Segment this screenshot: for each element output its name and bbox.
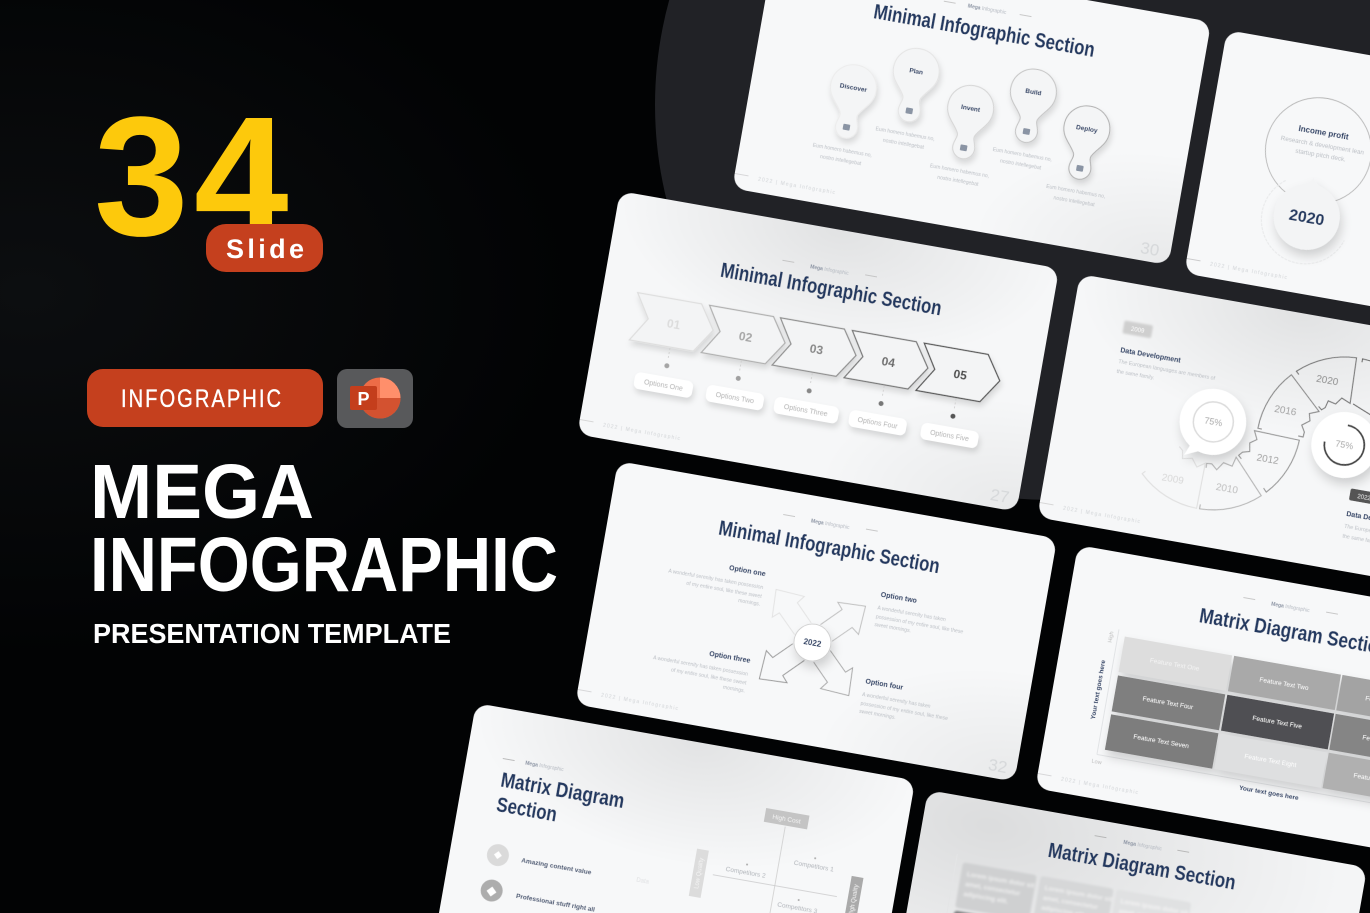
card background (575, 461, 1057, 782)
option four text: Option four (865, 678, 904, 692)
step 04: 04 (881, 354, 896, 370)
segment 2009 (1138, 441, 1207, 508)
year ring (1254, 177, 1353, 270)
y axis label: Your text goes here (1090, 659, 1107, 720)
heading: Mega Infographic (810, 264, 850, 277)
footer (1039, 501, 1141, 525)
option four text: A wonderful serenity has taken (862, 692, 931, 710)
bulb: Invent: Invent (960, 104, 981, 114)
heading: Mega Infographic (525, 761, 565, 773)
feature cells (947, 862, 1191, 913)
segment 2010: 2010 (1215, 482, 1239, 497)
title: MEGA (90, 449, 314, 535)
axis tag: low quality (689, 849, 709, 898)
option three text: A wonderful serenity has taken possession (653, 655, 749, 678)
option two text: sweet mornings. (874, 622, 911, 634)
footer (1037, 772, 1139, 796)
income text: startup pitch deck. (1295, 148, 1347, 164)
competitors (721, 842, 836, 913)
panel: slide data development (1037, 274, 1370, 595)
cell: Feature Text Eight: Feature Text Eight (1244, 753, 1297, 769)
axis tag: high cost: High Cost (772, 814, 801, 826)
segment 2009: 2009 (1161, 472, 1185, 487)
step 01: 01 (666, 316, 682, 332)
card background (1037, 274, 1370, 595)
option two text (874, 592, 968, 643)
bulb: Deploy (1044, 101, 1120, 210)
card background (1184, 30, 1370, 351)
cell: Feature Text Five: Feature Text Five (1252, 715, 1303, 731)
badge: Slide: Slide (226, 234, 304, 264)
step 02: Options Two (715, 392, 755, 405)
cell: lorem 2: Lorem ipsum dolor sit (1044, 885, 1113, 904)
center badge 2022: 2022 (803, 637, 822, 649)
option four text: possession of my entire soul, like these (860, 701, 948, 722)
panel: slide income profit (1184, 30, 1370, 351)
heading: Matrix Diagram Section (1046, 839, 1237, 895)
footer (577, 688, 679, 712)
panel: slide 27 arrows (577, 191, 1059, 512)
option two text: Option two (880, 592, 917, 605)
segment 2012: 2012 (1256, 453, 1280, 467)
heading (493, 757, 628, 838)
footer (579, 418, 681, 442)
heading (1046, 827, 1240, 895)
option two text: A wonderful serenity has taken (877, 605, 946, 623)
panel: slide matrix diagram bottom-right (885, 790, 1367, 913)
left text block (1115, 320, 1223, 392)
income text: Income profit (1298, 124, 1350, 142)
cell: lorem 2 (1033, 876, 1115, 913)
arrow: upper left (769, 589, 816, 637)
bulb: Deploy: Deploy (1075, 124, 1098, 135)
cell: lorem 1: amet, consectetur (965, 881, 1021, 898)
cell: Feature Text Seven (1105, 714, 1218, 769)
subtitle: PRESENTATION TEMPLATE (93, 618, 451, 649)
heading: Minimal Infographic Section (719, 259, 943, 320)
step 05: Options Five (929, 430, 969, 443)
footer: 2022 | Mega Infographic (1060, 777, 1139, 796)
panel: slide matrix quadrant bottom-left (433, 703, 915, 913)
cell: lorem 3 (1109, 889, 1191, 913)
gauge 75% left: 75% (1204, 415, 1223, 428)
left text block: The European languages are members of (1118, 359, 1216, 382)
bulb: Discover: nostro intellegebat (820, 154, 862, 167)
step 02 (693, 305, 789, 413)
segment 2012 (1233, 429, 1300, 496)
axis tag: low quality: Low Quality (694, 857, 705, 889)
badge: INFOGRAPHIC (87, 369, 323, 427)
heading: Mega Infographic (1123, 840, 1163, 853)
segment 2016: 2016 (1273, 404, 1298, 419)
matrix axes: Low (1091, 759, 1102, 766)
center badge 2022 (791, 621, 834, 664)
cell: Feature Text Nine (1322, 753, 1370, 807)
option one text: of my entire soul, like these sweet (686, 581, 763, 600)
heading (719, 249, 945, 320)
year bubble 2020: 2020 (1288, 207, 1326, 230)
step 05: 05 (952, 367, 968, 383)
footer: 2022 | Mega Infographic (602, 423, 681, 442)
headline number 34: 34 (94, 82, 289, 272)
income text (1278, 121, 1367, 167)
arrow: upper right (818, 599, 866, 646)
footer: 2022 | Mega Infographic (1062, 506, 1141, 525)
footer (1186, 257, 1288, 281)
axis tag: high quality (843, 876, 864, 913)
step 01: Options One (643, 379, 683, 393)
cell: Feature Text Three (1336, 675, 1370, 729)
option three text (650, 641, 751, 695)
gauge 75% left (1174, 384, 1251, 465)
faint data label: Data (636, 878, 650, 886)
cell: lorem 2: amet, consectetur (1042, 895, 1099, 911)
option three text: of my entire soul, like these sweet (670, 667, 747, 687)
title (90, 449, 558, 608)
quadrant axes (695, 816, 847, 913)
arrow: lower right (809, 648, 856, 696)
heading: Section (495, 793, 559, 827)
card background (885, 790, 1367, 913)
card background (1035, 545, 1370, 866)
axis tag: high cost (764, 808, 810, 829)
page number: 30 (1139, 238, 1161, 260)
page number: 32 (987, 755, 1009, 777)
heading: Mega Infographic (967, 3, 1007, 16)
option one text: A wonderful serenity has taken possession (668, 568, 764, 591)
matrix axes (1086, 628, 1370, 824)
bulb: Build (990, 64, 1067, 173)
gauge 75% right (1306, 407, 1370, 483)
cell: Feature Text One: Feature Text One (1149, 657, 1200, 673)
heading: Mega Infographic (810, 518, 850, 531)
bulb: Discover: Eum homero habemus no, (812, 143, 872, 159)
footer: 2022 | Mega Infographic (1209, 262, 1288, 281)
step 04: Options Four (857, 417, 899, 431)
footer (734, 172, 836, 196)
bulb: Build: Eum homero habemus no, (992, 147, 1052, 163)
gauge 75% right: 75% (1335, 439, 1354, 451)
bulb: Plan: Eum homero habemus no, (875, 126, 935, 143)
segment 2020 (1291, 348, 1358, 415)
bulb: Deploy: Eum homero habemus no, (1046, 184, 1106, 200)
card background (433, 703, 915, 913)
dark backdrop circle (655, 0, 1370, 500)
heading: Minimal Infographic Section (717, 517, 941, 578)
badge: Slide (206, 224, 323, 272)
segment 2010 (1199, 452, 1267, 519)
step 03 (764, 318, 860, 425)
heading: Matrix Diagram (499, 769, 626, 813)
matrix axes: High (1108, 631, 1115, 643)
bulb: Plan (873, 44, 950, 152)
cell: Feature Text Four: Feature Text Four (1142, 696, 1194, 712)
left text block: Data Development (1120, 347, 1182, 365)
cell: lorem 1: adipiscing elit. (963, 891, 1009, 906)
bulb: Invent: nostro intellegebat (937, 175, 979, 188)
step 05 (908, 343, 1004, 451)
bulb: Discover: Discover (839, 82, 868, 94)
step 04 (836, 330, 932, 438)
icon: PowerPoint (337, 369, 413, 428)
cell: lorem 1 (955, 862, 1037, 913)
bulb: Invent: Eum homero habemus no, (929, 163, 990, 180)
option four text: sweet mornings. (859, 709, 896, 721)
step 03: 03 (809, 341, 825, 358)
arrow: lower left (759, 639, 807, 686)
panel: slide 30 bulbs (732, 0, 1211, 265)
badge: INFOGRAPHIC: INFOGRAPHIC (121, 385, 283, 413)
axis (933, 854, 957, 913)
cell: Feature Text Five (1221, 695, 1334, 749)
card background (732, 0, 1211, 265)
left text block: the same family. (1116, 369, 1155, 381)
option one text (665, 555, 767, 608)
bulb: Build: nostro intellegebat (1000, 158, 1042, 172)
income circle (1257, 89, 1370, 212)
cell: Feature Text Two: Feature Text Two (1259, 677, 1309, 692)
segment next (1351, 359, 1370, 425)
list item: professional stuff (479, 878, 597, 913)
bulb: Build: Build (1025, 88, 1042, 97)
cell: lorem 1: Lorem ipsum dolor sit (966, 871, 1036, 890)
panel: slide 32 four-way arrows (575, 461, 1057, 782)
left text block: 2009 (1130, 327, 1145, 335)
cell: Feature Text Six (1329, 714, 1370, 769)
option four text (859, 678, 952, 730)
x axis label: Your text goes here (1239, 785, 1299, 802)
step 03: Options Three (783, 404, 828, 418)
heading: Mega Infographic (1271, 601, 1310, 614)
bulb: Deploy: nostro intellegebat (1053, 195, 1096, 208)
title: INFOGRAPHIC (90, 522, 558, 608)
bulb: Plan: nostro intellegebat (882, 138, 925, 151)
panel: slide matrix diagram right (1035, 545, 1370, 866)
footer: 2022 | Mega Infographic (757, 177, 836, 196)
option one text: Option one (728, 565, 766, 578)
cell: lower dark (947, 910, 1028, 913)
cell: Feature Text Eight (1214, 734, 1327, 788)
bulb: Discover (810, 60, 887, 169)
heading (717, 503, 944, 578)
competitors: Competitors 2 (725, 866, 766, 880)
cell: Feature Text Four (1112, 675, 1225, 730)
bulb: Invent (928, 81, 1004, 189)
year bubble 2020 (1269, 172, 1346, 255)
icon: PowerPoint: P (357, 389, 370, 409)
list item: amazing content (485, 842, 594, 883)
option one text: mornings. (738, 598, 761, 608)
matrix cells (1105, 637, 1370, 807)
heading (872, 0, 1099, 62)
step 02: 02 (738, 329, 754, 345)
heading: Minimal Infographic Section (872, 0, 1097, 62)
bulb: Plan: Plan (909, 67, 923, 77)
list item: amazing content: Amazing content value (521, 857, 592, 877)
segment 2020: 2020 (1315, 374, 1340, 388)
cell: Feature Text One (1119, 637, 1232, 691)
segment 2016 (1258, 371, 1325, 439)
card background (577, 191, 1059, 512)
option three text: mornings. (722, 685, 745, 694)
option two text: possession of my entire soul, like these (875, 614, 964, 636)
right text block (1342, 488, 1370, 557)
footer: 2022 | Mega Infographic (600, 693, 679, 712)
step 01 (621, 293, 717, 400)
income text: Research & development lean (1280, 135, 1365, 157)
cell: Feature Text Two (1228, 656, 1341, 710)
cell: Feature Text Seven: Feature Text Seven (1133, 734, 1190, 750)
option three text: Option three (709, 651, 751, 665)
page number: 27 (989, 485, 1011, 507)
competitors: Competitors 1 (793, 860, 835, 874)
